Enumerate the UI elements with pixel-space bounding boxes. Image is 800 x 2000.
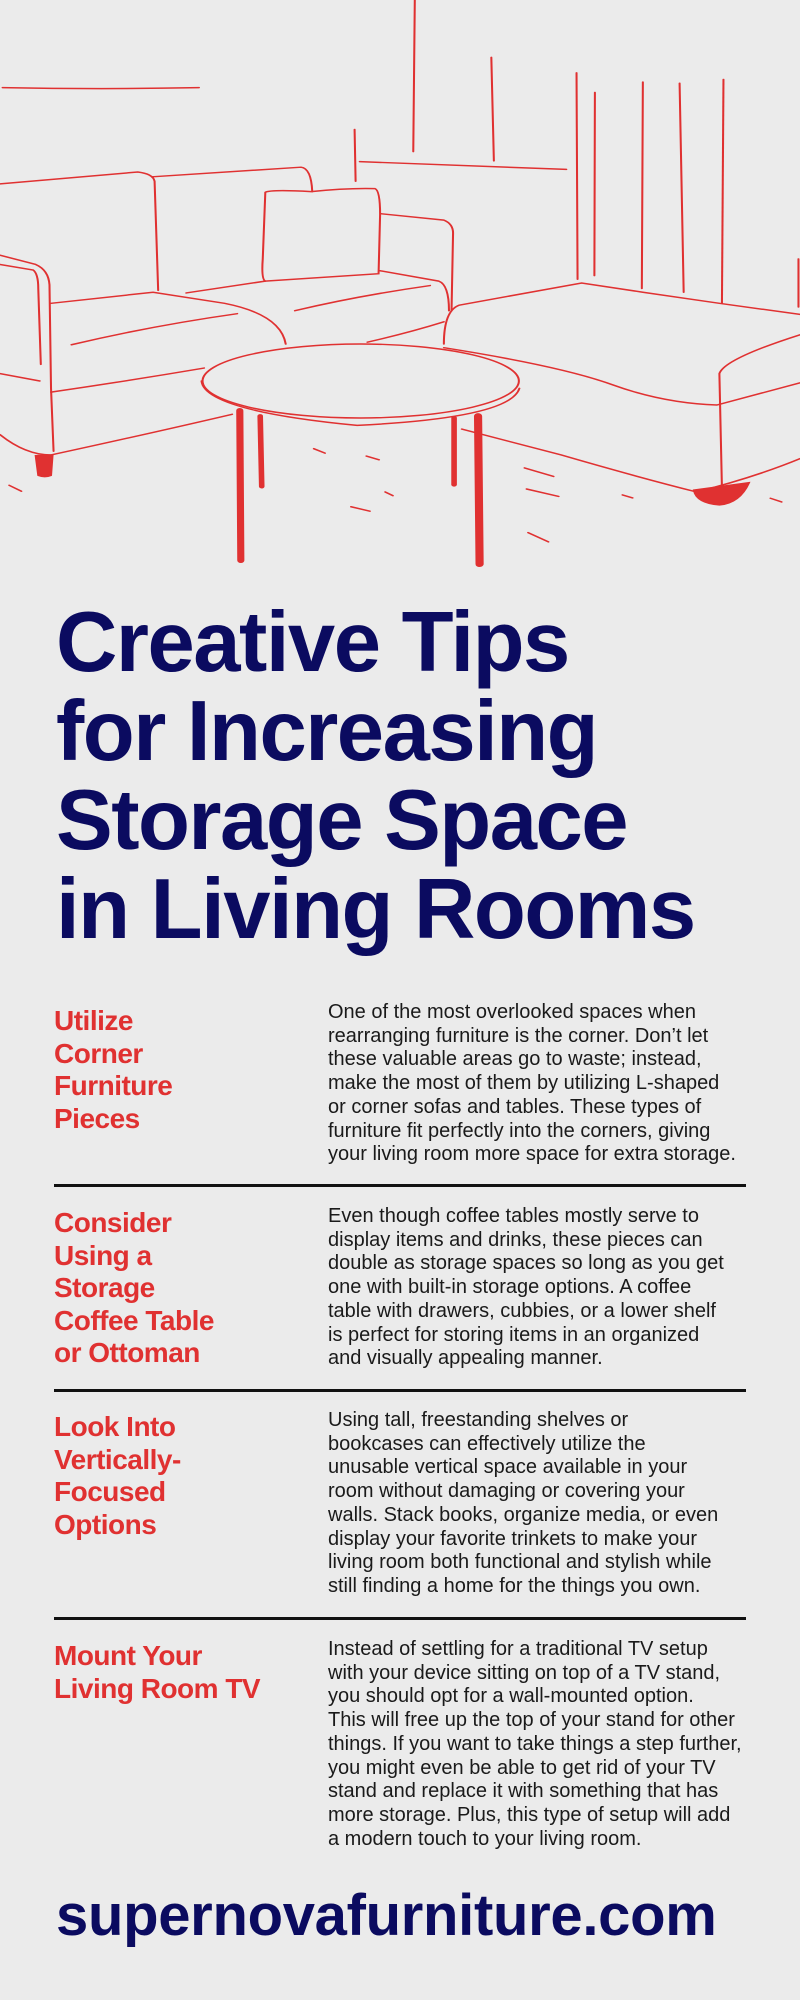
section 2 heading: or Ottoman [54, 1337, 200, 1368]
section 4 heading: Living Room TV [54, 1672, 260, 1704]
section 2 heading [54, 1207, 214, 1368]
footer url: supernovafurniture.com [56, 1883, 717, 1948]
section 2 heading: Consider [54, 1207, 171, 1238]
section 1 text: One of the most overlooked spaces when [328, 1001, 696, 1023]
section 2 text: one with built-in storage options. A coffee [328, 1276, 691, 1298]
section 3 heading: Vertically- [54, 1444, 181, 1474]
section 4 text: This will free up the top of your stand for other [328, 1709, 735, 1731]
section 3 text: Using tall, freestanding shelves or [328, 1409, 628, 1431]
section 1 heading [54, 1005, 172, 1134]
illustration: living room sketch [0, 0, 800, 567]
section 4 text: a modern touch to your living room. [328, 1828, 642, 1850]
section 4 text: you might even be able to get rid of your TV [328, 1757, 716, 1779]
section 1 heading: Furniture [54, 1070, 172, 1101]
section 2 text: and visually appealing manner. [328, 1347, 603, 1369]
section 4 text: with your device sitting on top of a TV stand, [328, 1662, 720, 1684]
section 4 text: stand and replace it with something that has [328, 1780, 718, 1802]
section 4 text: you should opt for a wall-mounted option. [328, 1685, 694, 1707]
section 3 text: display your favorite trinkets to make your [328, 1528, 697, 1550]
section 1 text: these valuable areas go to waste; instead, [328, 1048, 702, 1070]
section 1 text [328, 1001, 736, 1165]
section 1 heading: Pieces [54, 1102, 140, 1134]
section 3 text: still finding a home for the things you own. [328, 1575, 700, 1597]
section 1 text: your living room more space for extra storage. [328, 1143, 736, 1165]
title [56, 595, 695, 957]
section 2 text: display items and drinks, these pieces can [328, 1229, 703, 1251]
section 3 heading: Focused [54, 1476, 166, 1507]
section 4 heading: Mount Your [54, 1640, 202, 1671]
section 3 text [328, 1409, 718, 1597]
section 1 text: rearranging furniture is the corner. Don’t let [328, 1025, 708, 1047]
section 3 text: unusable vertical space available in your [328, 1456, 687, 1478]
section 1 text: furniture fit perfectly into the corners, giving [328, 1120, 710, 1142]
section 4 text: things. If you want to take things a step further, [328, 1733, 742, 1755]
section 2 text: is perfect for storing items in an organized [328, 1324, 699, 1346]
section 1 heading: Utilize [54, 1005, 133, 1036]
section 3 text: living room both functional and stylish while [328, 1551, 712, 1573]
section 4 text: more storage. Plus, this type of setup will add [328, 1804, 730, 1826]
section 1 text: make the most of them by utilizing L-shaped [328, 1072, 719, 1094]
section 1 text: or corner sofas and tables. These types of [328, 1096, 701, 1118]
title: Storage Space [56, 773, 627, 868]
section 4 heading [54, 1640, 260, 1704]
section 3 text: bookcases can effectively utilize the [328, 1433, 646, 1455]
section 2 text [328, 1205, 724, 1369]
section 2 heading: Storage [54, 1272, 155, 1303]
section 3 text: walls. Stack books, organize media, or even [328, 1504, 718, 1526]
section 2 heading: Coffee Table [54, 1304, 214, 1336]
section 2 text: table with drawers, cubbies, or a lower shelf [328, 1300, 716, 1322]
section 3 heading: Look Into [54, 1411, 175, 1442]
section 3 heading: Options [54, 1508, 156, 1540]
section 4 text: Instead of settling for a traditional TV setup [328, 1638, 708, 1660]
section 3 text: room without damaging or covering your [328, 1480, 685, 1502]
section 1 heading: Corner [54, 1038, 143, 1068]
section 2 heading: Using a [54, 1240, 152, 1270]
section 4 text [328, 1638, 742, 1850]
section 3 heading [54, 1411, 181, 1540]
section 2 text: Even though coffee tables mostly serve to [328, 1205, 699, 1227]
title: in Living Rooms [56, 862, 695, 957]
section 2 text: double as storage spaces so long as you get [328, 1252, 724, 1274]
title: for Increasing [56, 684, 597, 779]
title: Creative Tips [56, 595, 569, 690]
